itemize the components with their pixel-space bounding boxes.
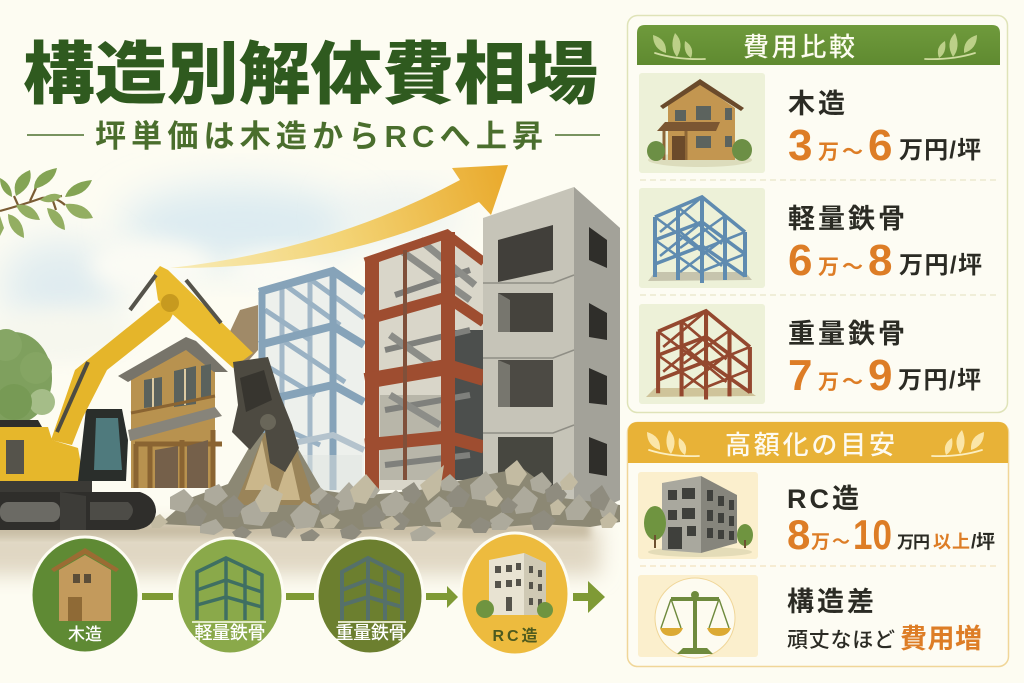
illustration: yellow excavator xyxy=(0,266,299,530)
subtitle with rules: 坪単価は木造からRCへ上昇 xyxy=(95,119,543,154)
flow node: light steel: 軽量鉄骨 xyxy=(194,623,266,643)
illustration background: sky and clouds xyxy=(0,185,460,361)
illustration: red heavy steel frame xyxy=(365,230,484,490)
row: light steel xyxy=(639,188,982,288)
price: 万 xyxy=(818,371,839,394)
price: 万 xyxy=(818,256,839,279)
flow: structure progression xyxy=(31,533,605,655)
row: structure difference xyxy=(638,575,982,658)
excavator boom xyxy=(51,298,178,445)
price xyxy=(788,121,981,170)
panel: signs of higher cost xyxy=(628,422,1008,666)
label: 重量鉄骨 xyxy=(788,319,908,349)
panel heading xyxy=(637,25,1000,65)
excavator stick xyxy=(154,266,253,368)
price: 万円 xyxy=(897,533,930,552)
row: RC xyxy=(638,472,995,559)
row: wood xyxy=(639,73,981,173)
flow node: RC: RC造 xyxy=(492,627,538,645)
price: 万 xyxy=(811,532,830,553)
illustration: wooden house xyxy=(118,337,228,492)
price: 6 xyxy=(788,236,812,285)
connector xyxy=(142,593,173,600)
price: 〜 xyxy=(832,532,850,552)
label: RC造 xyxy=(787,484,862,514)
note: 費用増 xyxy=(900,624,982,654)
price: 3 xyxy=(788,121,812,170)
price: 以上 xyxy=(933,532,970,552)
arrow connector xyxy=(426,586,458,608)
excavator body xyxy=(0,427,125,481)
panel heading xyxy=(628,422,1008,463)
panel heading: 高額化の目安 xyxy=(725,430,895,460)
thumbnail: blue frame xyxy=(639,188,765,288)
thumbnail: red frame xyxy=(639,304,765,404)
illustration: concrete rubble xyxy=(150,460,618,541)
price: /坪 xyxy=(971,531,995,553)
illustration: background tree xyxy=(0,329,55,424)
excavator cab xyxy=(78,409,128,481)
illustration: blue light steel frame xyxy=(259,270,364,495)
price: 7 xyxy=(788,351,812,400)
divider xyxy=(640,565,996,567)
divider xyxy=(640,294,996,296)
note: 頑丈なほど xyxy=(787,629,895,652)
title: 構造別解体費相場 xyxy=(23,37,598,113)
thumbnail: RC building xyxy=(638,472,758,559)
price: 万円/坪 xyxy=(898,367,981,394)
price: 9 xyxy=(868,351,892,400)
price: 〜 xyxy=(842,256,863,279)
panel: cost comparison xyxy=(628,16,1008,412)
illustration: ground xyxy=(0,522,600,575)
flow node: RC xyxy=(461,533,569,655)
divider xyxy=(640,179,996,181)
label: 軽量鉄骨 xyxy=(788,204,908,234)
price: 8 xyxy=(787,511,810,558)
flow node: light steel xyxy=(177,538,283,654)
flow node: wood: 木造 xyxy=(68,625,102,644)
panel heading: 費用比較 xyxy=(743,32,855,62)
price xyxy=(787,511,995,558)
price: 6 xyxy=(868,121,892,170)
arrow: cost rising xyxy=(170,165,508,268)
row: heavy steel xyxy=(639,304,981,404)
price: 8 xyxy=(868,236,892,285)
price: 10 xyxy=(853,511,892,558)
price xyxy=(788,236,982,285)
price: 〜 xyxy=(842,371,863,394)
label: 構造差 xyxy=(787,587,877,617)
price: 万円/坪 xyxy=(899,252,982,279)
label: 木造 xyxy=(788,89,848,119)
illustration: ruined timber behind house xyxy=(226,305,258,370)
thumbnail: wooden house xyxy=(639,73,765,173)
connector xyxy=(286,593,314,600)
illustration: debris mound xyxy=(160,425,620,530)
price: 万円/坪 xyxy=(899,137,981,164)
icon: leafy branch xyxy=(0,168,93,238)
flow node: wood xyxy=(31,537,139,653)
flow node: heavy steel: 重量鉄骨 xyxy=(336,623,406,643)
flow node: heavy steel xyxy=(317,538,423,654)
arrow connector xyxy=(573,581,605,613)
thumbnail: scales xyxy=(638,575,758,658)
excavator grapple xyxy=(232,357,299,472)
price xyxy=(788,351,981,400)
price: 万 xyxy=(818,141,839,164)
note xyxy=(787,624,982,654)
price: 〜 xyxy=(842,141,863,164)
illustration: concrete RC building xyxy=(483,187,620,520)
excavator tracks xyxy=(0,492,156,530)
